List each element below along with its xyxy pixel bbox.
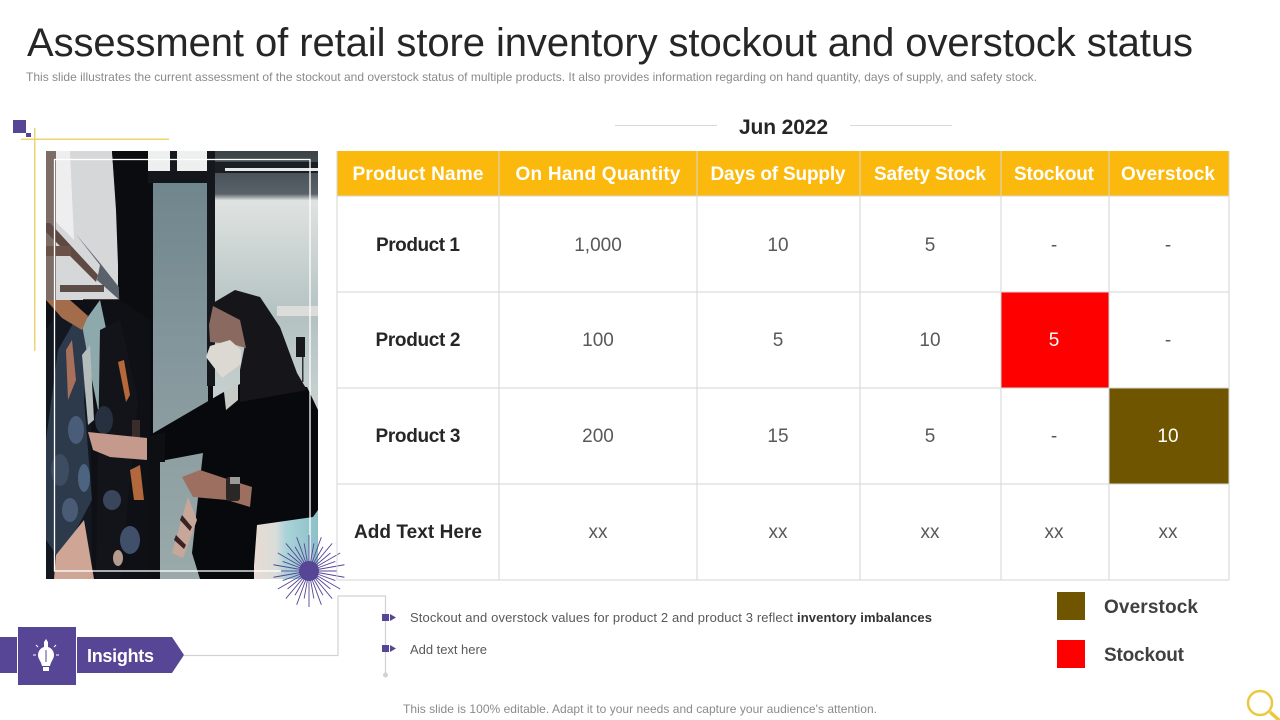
row: product 2 — [376, 330, 1171, 351]
row: add text here — [354, 522, 1178, 543]
legend: overstock: Overstock — [1104, 597, 1198, 618]
clothes on rack — [46, 299, 150, 579]
table date heading: Jun 2022 — [739, 116, 828, 139]
legend: stockout — [1057, 640, 1185, 668]
row: add text here: xx — [588, 522, 608, 543]
legend: stockout: Stockout — [1104, 645, 1185, 666]
row: product 2: 5 — [1049, 330, 1059, 351]
highlighted stockout cell — [1001, 292, 1109, 388]
table header row — [337, 151, 1229, 196]
row: product 1: 1,000 — [574, 235, 622, 256]
row: product 3: 15 — [767, 426, 789, 447]
row: product 3: Product 3 — [376, 426, 460, 447]
insights banner — [0, 627, 184, 685]
icon: light bulb with pencil — [33, 639, 59, 671]
woman — [88, 290, 318, 579]
table grid — [337, 151, 1229, 580]
highlighted overstock cell — [1109, 388, 1229, 484]
row: product 1: 5 — [925, 235, 935, 256]
insight bullet 1: Stockout and overstock values for product 2 and product 3 reflect — [410, 610, 793, 625]
icon: magnifying glass — [1248, 691, 1280, 720]
row: product 3: 5 — [925, 426, 935, 447]
row: product 2: - — [1165, 330, 1171, 351]
legend: overstock — [1057, 592, 1198, 620]
corner decoration — [13, 120, 169, 351]
table header row: Overstock — [1121, 164, 1215, 185]
row: product 2: 10 — [919, 330, 941, 351]
row: product 2: 100 — [582, 330, 614, 351]
legend — [1057, 592, 1198, 668]
row: product 2: 5 — [773, 330, 783, 351]
subtitle: This slide illustrates the current assessment of the stockout and overstock status of multiple products. It also provides information regarding on hand quantity, days of supply, and safety stock. — [26, 70, 1037, 84]
row: add text here: xx — [920, 522, 940, 543]
connector lines — [184, 596, 386, 675]
table header row: Safety Stock — [874, 164, 986, 185]
row: product 1 — [376, 235, 1171, 256]
table header row: On Hand Quantity — [516, 164, 681, 185]
photo white frame — [54, 160, 310, 571]
inventory table — [337, 151, 1229, 580]
photo: woman browsing clothes rack — [46, 151, 318, 579]
bag — [254, 510, 318, 579]
title: Assessment of retail store inventory stockout and overstock status — [27, 21, 1193, 65]
row: product 1: - — [1051, 235, 1057, 256]
insight bullet 2: Add text here — [410, 642, 487, 657]
row: product 3: 200 — [582, 426, 614, 447]
row: product 2: Product 2 — [376, 330, 460, 351]
insights banner: Insights — [87, 646, 154, 666]
insight bullet 1: inventory imbalances — [797, 610, 932, 625]
footer note: This slide is 100% editable. Adapt it to your needs and capture your audience's attention. — [403, 702, 877, 716]
row: add text here: Add Text Here — [354, 522, 482, 543]
row: product 3: 10 — [1157, 426, 1179, 447]
insight bullet 1 — [382, 610, 932, 625]
row: add text here: xx — [768, 522, 788, 543]
row: product 1: 10 — [767, 235, 789, 256]
row: product 3 — [376, 426, 1179, 447]
row: add text here: xx — [1158, 522, 1178, 543]
table header row: Product Name — [352, 164, 484, 185]
table header row: Stockout — [1014, 164, 1095, 185]
table header row: Days of Supply — [710, 164, 846, 185]
row: product 1: Product 1 — [376, 235, 460, 256]
row: product 1: - — [1165, 235, 1171, 256]
connector end dot — [383, 672, 388, 678]
row: add text here: xx — [1044, 522, 1064, 543]
row: product 3: - — [1051, 426, 1057, 447]
starburst — [274, 535, 344, 607]
